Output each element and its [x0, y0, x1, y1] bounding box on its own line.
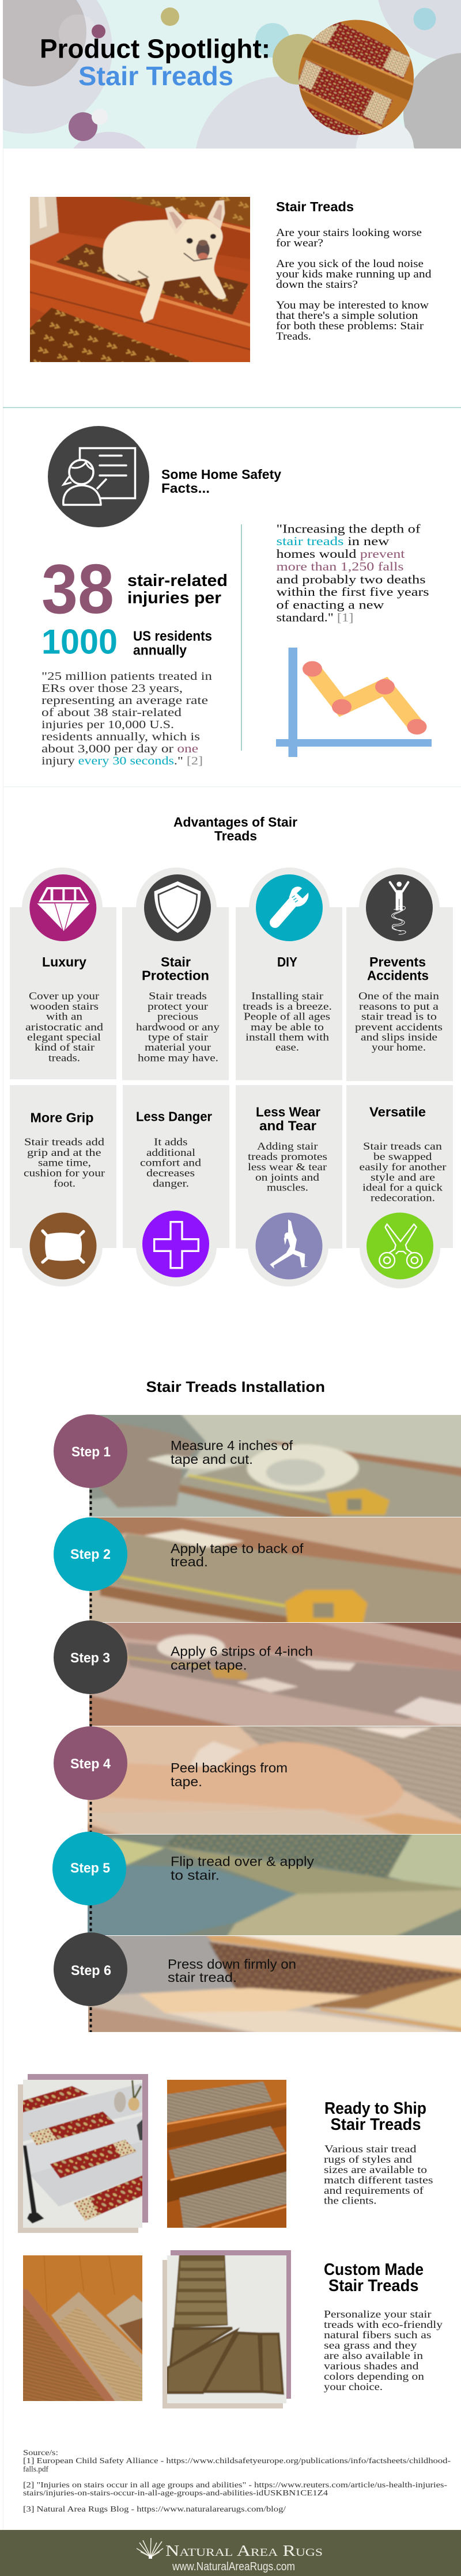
heading: Ready to Ship: [324, 2099, 426, 2118]
stair mat lower: [27, 307, 200, 365]
card text: [355, 990, 443, 1053]
card title: Less Danger: [136, 1109, 212, 1124]
step text: Peel backings from: [171, 1760, 288, 1775]
quote: increasing the depth: stair treads in new: [277, 534, 390, 548]
card text: comfort and: [140, 1157, 201, 1169]
sources: [2] "Injuries on stairs occur in all age groups and abilities" - https://www.reuters.com/article/us-health-injuries-: [23, 2480, 448, 2489]
card text: [243, 990, 332, 1053]
icon: wrench: [275, 886, 308, 923]
photo: step 3 carpet tape: [89, 1623, 461, 1726]
icon: yoga figure: [270, 1219, 308, 1269]
step text: Measure 4 inches of: [171, 1438, 293, 1453]
card text: same time,: [38, 1157, 91, 1169]
card: Versatile: [346, 1085, 453, 1288]
step badge: [54, 1726, 127, 1800]
photo: beige stair treads on wood: [165, 2077, 289, 2230]
photo: sisal stair treads on wood: [21, 2252, 145, 2403]
photo group: custom seagrass stairs: [163, 2250, 291, 2408]
step text: [171, 1644, 313, 1673]
quote: increasing the depth: and probably two deaths: [277, 572, 425, 586]
text: ready to ship: [324, 2099, 433, 2206]
step number: Step 1: [71, 1444, 111, 1460]
card text: on joints and: [255, 1171, 319, 1183]
step number: Step 6: [71, 1963, 111, 1978]
text: custom made: [324, 2261, 443, 2392]
step badge: [54, 1620, 127, 1694]
photo: step 1 measuring tape: [89, 1415, 461, 1517]
description: the clients.: [324, 2194, 377, 2206]
card text: reasons to put a: [359, 1000, 439, 1012]
step text: Apply tape to back of: [171, 1541, 304, 1556]
step text: tape and cut.: [171, 1452, 253, 1467]
step text: tread.: [171, 1554, 208, 1569]
photo: step 6 press down: [88, 1936, 461, 2032]
card text: install them with: [245, 1032, 329, 1043]
quote: 25 million patients: about 3,000 per day or one: [41, 743, 198, 755]
description: Personalize your stair: [324, 2308, 432, 2320]
description: are also available in: [324, 2350, 423, 2361]
sources: [1] European Child Safety Alliance - https://www.childsafetyeurope.org/publications/info/factsheets/childhood-: [23, 2456, 451, 2465]
step badge: [52, 1832, 126, 1905]
card text: muscles.: [267, 1181, 308, 1193]
sources: [23, 2448, 451, 2513]
card text: and slips inside: [361, 1032, 437, 1043]
card text: [24, 1136, 105, 1189]
card text: [25, 990, 103, 1064]
quote: increasing the depth: [277, 522, 429, 624]
card title: [142, 954, 209, 983]
card text: stair tread is to: [361, 1011, 437, 1022]
step text: [171, 1438, 293, 1467]
quote: 25 million patients: representing an average rate: [41, 694, 208, 707]
card text: Adding stair: [257, 1140, 318, 1152]
intro heading: Stair Treads: [276, 199, 354, 214]
card text: treads.: [48, 1052, 80, 1064]
step text: stair tread.: [168, 1970, 237, 1985]
card text: Stair treads can: [363, 1140, 442, 1152]
heading: advantages: Advantages of Stair: [173, 815, 297, 830]
step text: [171, 1541, 304, 1569]
card title: [256, 1104, 320, 1133]
step badge: [54, 1932, 127, 2006]
intro paragraphs: Are you sick of the loud noise: [276, 258, 424, 270]
quote: 25 million patients: injuries per 10,000 U.S.: [41, 718, 174, 731]
step 4: [54, 1726, 288, 1800]
card: Stair Protection: [122, 867, 229, 1080]
heading: advantages: Treads: [214, 828, 257, 843]
heading: home safety facts: Facts...: [161, 481, 210, 496]
quote: 25 million patients: of about 38 stair-related: [41, 706, 182, 719]
description: and requirements of: [324, 2185, 424, 2196]
heading: Stair Treads: [328, 2277, 418, 2295]
step text: carpet tape.: [171, 1658, 247, 1673]
card text: Installing stair: [251, 990, 323, 1002]
step text: Apply 6 strips of 4-inch: [171, 1644, 313, 1659]
card text: It adds: [154, 1136, 188, 1148]
stat label: US residents: US residents: [133, 629, 212, 644]
card title: DIY: [277, 954, 297, 969]
card text: People of all ages: [244, 1011, 330, 1022]
description: various shades and: [324, 2360, 418, 2372]
card: DIY: [236, 867, 342, 1080]
mat 3: [307, 106, 366, 135]
description: colors depending on: [324, 2370, 424, 2382]
intro paragraphs: down the stairs?: [276, 279, 358, 291]
step 5: [52, 1832, 315, 1905]
card text: cushion for your: [24, 1167, 105, 1179]
card: More Grip: [10, 1085, 116, 1287]
step text: [171, 1854, 315, 1883]
card text: ideal for a quick: [362, 1181, 443, 1193]
stair mat middle: [56, 243, 248, 315]
chart: falling line graph: [276, 648, 432, 757]
card text: less wear & tear: [248, 1161, 327, 1173]
icon: presenter at board: [48, 426, 149, 527]
description: rugs of styles and: [324, 2153, 412, 2165]
step text: to stair.: [171, 1868, 220, 1883]
heading: Stair Treads: [331, 2115, 421, 2134]
step 1: [54, 1414, 293, 1488]
divider: [241, 524, 242, 751]
website: www.NaturalAreaRugs.com: [172, 2560, 295, 2573]
timeline: dashed connector: [90, 1490, 92, 2032]
intro paragraphs: You may be interested to know: [276, 300, 429, 311]
description: sizes are available to: [324, 2164, 427, 2175]
card text: type of stair: [148, 1032, 208, 1043]
description: [324, 2308, 443, 2392]
quote: increasing the depth: more than 1,250 falls: [277, 560, 403, 573]
card text: material your: [145, 1041, 211, 1053]
step badge: [54, 1414, 127, 1488]
card: Less Wear and Tear: [236, 1085, 342, 1287]
quote: increasing the depth: "Increasing the depth of: [277, 522, 421, 535]
logo mark: [137, 2538, 163, 2559]
card: Less Danger: [123, 1085, 229, 1287]
step number: Step 4: [70, 1756, 111, 1772]
card text: redecoration.: [371, 1192, 435, 1203]
sources: stairs/injuries-on-stairs-occur-in-all-age-groups-and-abilities-idUSKBN1CE1Z4: [23, 2489, 328, 2497]
card text: Stair treads: [149, 990, 207, 1002]
card text: may be able to: [251, 1021, 324, 1033]
description: your choice.: [324, 2381, 383, 2392]
card text: One of the main: [358, 990, 439, 1002]
card text: aristocratic and: [25, 1021, 103, 1033]
card text: grip and at the: [27, 1147, 101, 1158]
card text: prevent accidents: [355, 1021, 443, 1033]
stat label: US residents: annually: [133, 642, 187, 659]
heading: [324, 2261, 424, 2295]
brand name: Natural Area Rugs: [165, 2542, 323, 2559]
stat label: stair-related injuries: [127, 572, 228, 607]
quote: 25 million patients: "25 million patients treated in: [41, 670, 212, 683]
intro paragraphs: [276, 227, 432, 343]
intro paragraphs: for both these problems: Stair: [276, 321, 424, 332]
step text: [168, 1957, 296, 1985]
card text: [136, 990, 220, 1064]
header banner: [3, 0, 461, 149]
sources: [3] Natural Area Rugs Blog - https://www.naturalarearugs.com/blog/: [23, 2505, 286, 2513]
card text: [140, 1136, 201, 1189]
icon: person on slippery surface: [390, 882, 408, 934]
step text: tape.: [171, 1774, 202, 1789]
card text: ease.: [275, 1041, 299, 1053]
photo: step 4 peel backing: [88, 1726, 461, 1834]
card text: kind of stair: [35, 1041, 95, 1053]
card: Luxury: [10, 867, 116, 1079]
card text: decreases: [146, 1167, 195, 1179]
card title: Luxury: [42, 954, 86, 969]
description: [324, 2143, 433, 2206]
card text: protect your: [148, 1000, 208, 1012]
step badge: [54, 1517, 127, 1591]
icon: plus: [154, 1222, 198, 1268]
step text: Flip tread over & apply: [171, 1854, 315, 1869]
photo: stair treads in circle: [298, 20, 414, 135]
photo group: ready to ship, red treads on marble: [18, 2074, 148, 2233]
mat 1: [313, 22, 410, 79]
card title: More Grip: [30, 1110, 93, 1125]
quote: 25 million patients: ERs over those 23 years,: [41, 682, 183, 695]
step number: Step 3: [70, 1650, 110, 1666]
card title: Stair: [161, 954, 191, 969]
quote: 25 million patients: injury every 30 seconds ." [2]: [41, 755, 203, 767]
card text: style and are: [371, 1171, 435, 1183]
icon: shield: [154, 881, 201, 933]
stat: 38: 38: [41, 550, 114, 628]
quote: 25 million patients: [41, 670, 212, 767]
photo: step 5 flip tread: [88, 1835, 461, 1935]
card text: treads is a breeze.: [243, 1000, 332, 1012]
card text: treads promotes: [248, 1151, 327, 1162]
card title: Less Wear: [256, 1104, 320, 1119]
description: match different tastes: [324, 2174, 433, 2186]
card text: your home.: [372, 1041, 426, 1053]
step text: Press down firmly on: [168, 1957, 296, 1972]
sources: falls.pdf: [23, 2465, 48, 2473]
step 2: [54, 1517, 304, 1591]
footer: [0, 2530, 461, 2576]
step 3: [54, 1620, 313, 1694]
photo: step 2 tread back: [89, 1517, 461, 1622]
card text: home may have.: [138, 1052, 218, 1064]
intro paragraphs: that there's a simple solution: [276, 310, 418, 322]
card title: Protection: [142, 968, 209, 983]
step number: Step 5: [70, 1860, 110, 1876]
description: sea grass and they: [324, 2339, 417, 2351]
intro paragraphs: your kids make running up and: [276, 269, 432, 280]
quote: 25 million patients: residents annually, which is: [41, 730, 200, 743]
step text: [171, 1760, 288, 1789]
mat 2: [296, 59, 393, 127]
card text: foot.: [54, 1178, 75, 1189]
step number: Step 2: [70, 1547, 111, 1562]
intro text: [276, 199, 432, 343]
heading: installation: Stair Treads Installation: [146, 1378, 325, 1395]
card text: easily for another: [360, 1161, 446, 1173]
photo: french bulldog on stair treads: [27, 193, 254, 365]
heading: [324, 2099, 426, 2134]
description: Various stair tread: [324, 2143, 416, 2155]
title: Stair Treads: [78, 61, 233, 91]
card title: Accidents: [367, 968, 429, 983]
card text: with an: [46, 1011, 82, 1022]
step 6: [54, 1932, 296, 2006]
stat label: US residents: [133, 629, 212, 659]
quote: increasing the depth: homes would prevent: [277, 547, 405, 561]
heading: advantages: [173, 815, 297, 843]
card text: Cover up your: [29, 990, 99, 1002]
title: Product Spotlight:: [40, 33, 270, 63]
description: treads with eco-friendly: [324, 2319, 443, 2330]
card text: wooden stairs: [30, 1000, 99, 1012]
intro paragraphs: Treads.: [276, 331, 311, 343]
quote: increasing the depth: within the first five years: [277, 585, 429, 599]
intro paragraphs: for wear?: [276, 238, 323, 249]
quote: increasing the depth: of enacting a new: [277, 598, 385, 612]
stat label: stair-related injuries: injuries per: [127, 589, 221, 607]
card text: [248, 1140, 327, 1193]
card text: [360, 1140, 446, 1203]
card title: Versatile: [369, 1104, 426, 1119]
card text: precious: [157, 1011, 198, 1022]
card title: Prevents: [369, 954, 426, 969]
stat: 1000: 1000: [41, 623, 118, 661]
heading: home safety facts: [161, 467, 281, 496]
card text: hardwood or any: [136, 1021, 220, 1033]
stat label: stair-related injuries: stair-related: [127, 572, 228, 590]
icon: diamond: [37, 887, 90, 931]
title: [40, 33, 270, 91]
description: natural fibers such as: [324, 2329, 431, 2341]
quote: increasing the depth: standard." [1]: [277, 610, 354, 624]
card text: be swapped: [373, 1151, 432, 1162]
card text: danger.: [153, 1178, 189, 1189]
card text: additional: [146, 1147, 195, 1158]
heading: Custom Made: [324, 2261, 424, 2279]
card title: and Tear: [259, 1118, 316, 1133]
sources: Source/s:: [23, 2448, 58, 2457]
card: Prevents Accidents: [346, 867, 453, 1081]
card text: Stair treads add: [24, 1136, 104, 1148]
icon: pillow: [43, 1231, 84, 1262]
icon: scissors: [379, 1224, 422, 1268]
card text: elegant special: [27, 1032, 101, 1043]
intro paragraphs: Are your stairs looking worse: [276, 227, 422, 239]
heading: home safety facts: Some Home Safety: [161, 467, 281, 482]
dog: [103, 219, 226, 322]
card title: [367, 954, 429, 983]
